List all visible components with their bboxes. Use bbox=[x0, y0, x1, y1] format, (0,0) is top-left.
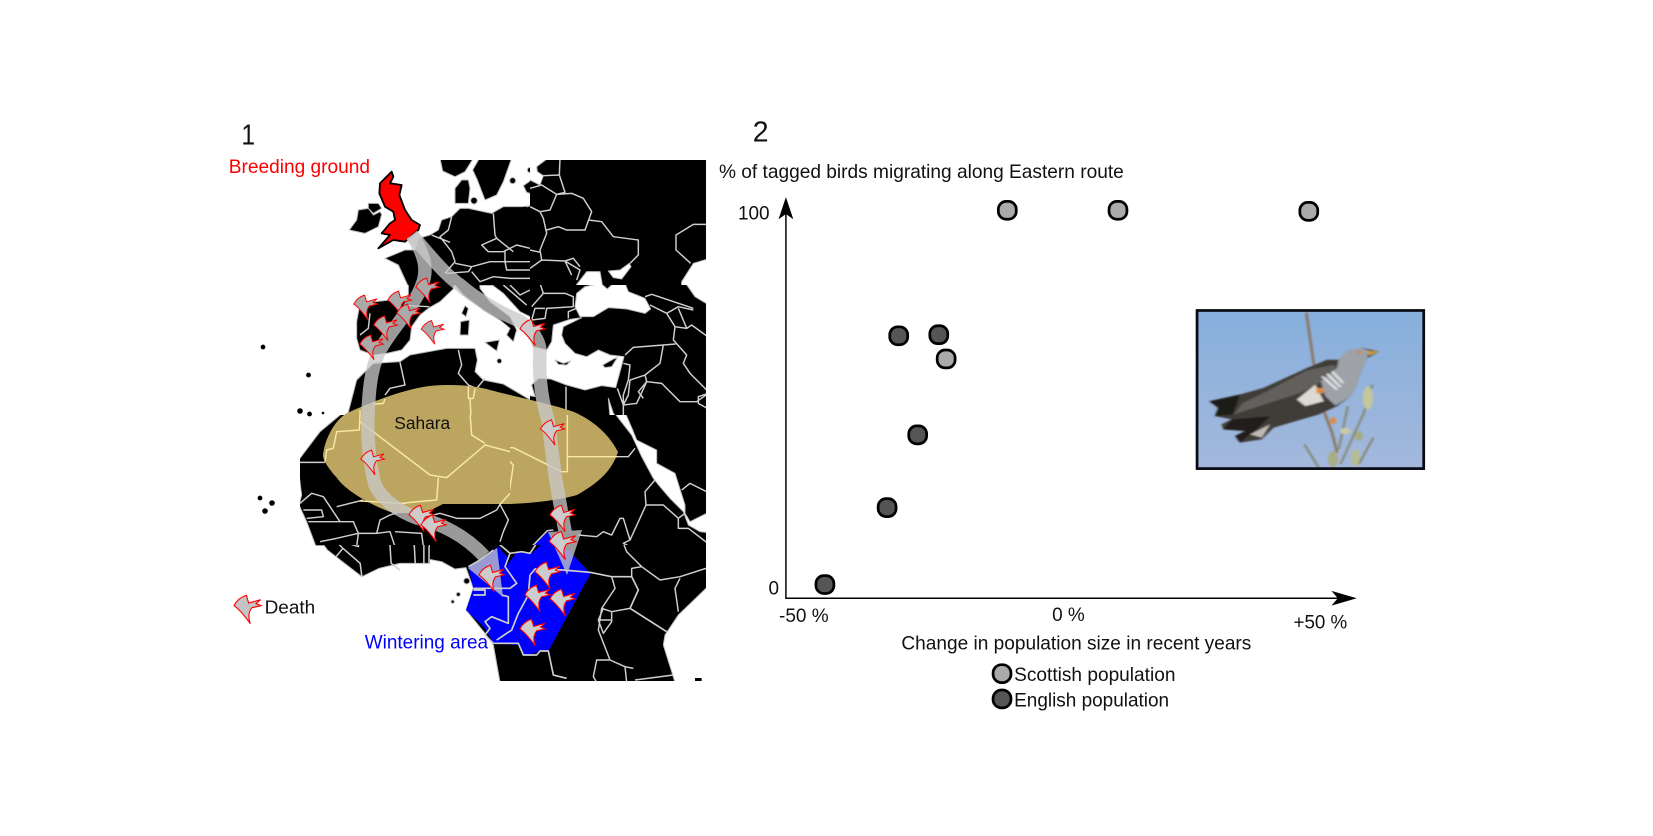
english population points bbox=[816, 326, 948, 594]
label: sahara: Sahara bbox=[394, 413, 450, 433]
x tick label +50 %: +50 % bbox=[1294, 612, 1347, 633]
y axis arrow bbox=[779, 197, 793, 599]
map: west africa bbox=[297, 412, 513, 548]
y tick label 100: 100 bbox=[738, 203, 770, 224]
western migration route arrow bbox=[368, 235, 503, 597]
x axis arrow bbox=[785, 591, 1357, 606]
panel: scatter chart bbox=[719, 161, 1357, 711]
panel: migration map bbox=[234, 157, 713, 682]
death markers along eastern route bbox=[520, 319, 576, 560]
death markers in wintering area bbox=[479, 562, 575, 646]
label: death: Death bbox=[265, 597, 315, 618]
eastern migration route arrow bbox=[412, 235, 582, 575]
legend: scottish population: Scottish population bbox=[1014, 664, 1175, 686]
atlantic islands bbox=[258, 345, 324, 514]
scottish population points bbox=[937, 201, 1318, 368]
panel number 2: 2 bbox=[753, 116, 769, 148]
cuckoo body bbox=[1209, 347, 1379, 443]
icon: death legend bird bbox=[234, 595, 261, 624]
twigs with buds bbox=[1304, 385, 1373, 468]
death markers along western route bbox=[354, 278, 446, 542]
x tick label 0 %: 0 % bbox=[1052, 605, 1085, 626]
label: breeding ground: Breeding ground bbox=[229, 156, 370, 178]
label: wintering area: Wintering area bbox=[365, 631, 488, 653]
y tick label 0: 0 bbox=[769, 579, 779, 600]
panel number 1: 1 bbox=[241, 119, 255, 151]
map: coast of west africa bbox=[323, 545, 430, 578]
map: balkans, turkey and middle east bbox=[527, 282, 712, 418]
y axis title: % of tagged birds migrating along Eastern route bbox=[719, 161, 1124, 183]
branch bbox=[1306, 313, 1337, 453]
map: iberia, italy and north africa bbox=[347, 282, 533, 418]
sahara region bbox=[323, 385, 618, 513]
map: sudan and east africa bbox=[508, 412, 713, 548]
photo: cuckoo on branch bbox=[1197, 310, 1424, 469]
map: eastern europe and russia bbox=[527, 157, 712, 288]
x axis title: Change in population size in recent years bbox=[901, 632, 1252, 654]
x tick label -50 %: -50 % bbox=[779, 606, 829, 627]
map: northwest europe and british isles bbox=[348, 160, 530, 286]
legend: english population: English population bbox=[1014, 689, 1169, 711]
map: central africa and wintering area in blue bbox=[427, 542, 713, 682]
